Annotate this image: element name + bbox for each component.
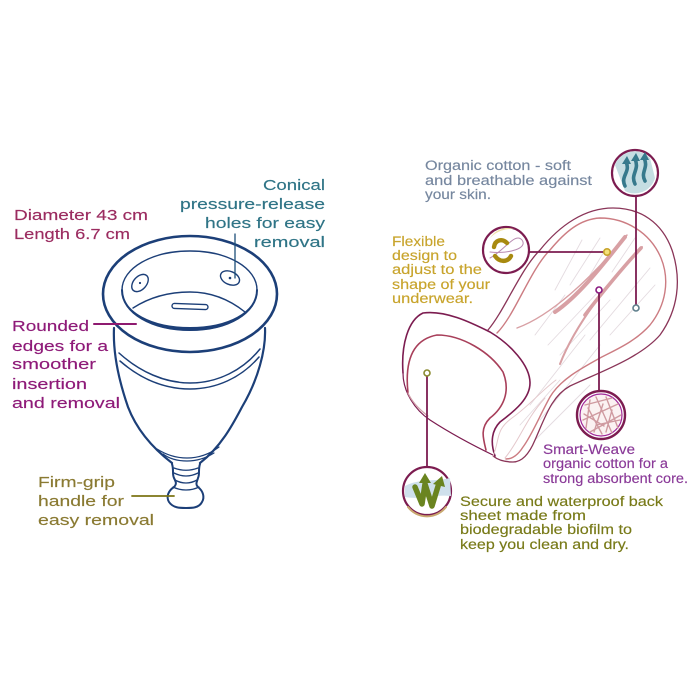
menstrual cup illustration <box>103 236 277 508</box>
pad tail folds <box>493 380 556 458</box>
text: dimensions: Diameter 43 cm <box>14 207 148 224</box>
text: firm grip handle <box>38 474 154 529</box>
slot <box>172 303 208 310</box>
text: organic cotton: your skin. <box>425 187 491 202</box>
cup body <box>114 328 265 463</box>
front wing outer <box>403 313 530 456</box>
pad absorbent stripes <box>517 235 627 328</box>
text: dimensions: Length 6.7 cm <box>14 226 130 243</box>
cup lower seam <box>157 447 219 461</box>
text: back sheet <box>460 494 663 552</box>
icon: waterproof back sheet <box>403 370 451 516</box>
text: back sheet: sheet made from <box>460 508 586 523</box>
text: dimensions <box>14 207 148 243</box>
text: smart weave <box>543 442 688 486</box>
text: rounded edges: and removal <box>12 395 120 412</box>
text: flexible design: design to <box>392 248 457 263</box>
handle <box>168 464 203 508</box>
text: conical holes <box>180 177 326 251</box>
right hole <box>218 268 242 288</box>
pad outer outline <box>488 208 677 462</box>
pad hatching <box>520 238 655 440</box>
handle rings <box>173 468 199 490</box>
text: rounded edges: Rounded <box>12 318 89 335</box>
text: back sheet: keep you clean and dry. <box>460 537 629 552</box>
icon: smart weave <box>577 287 625 439</box>
left hole <box>128 271 152 295</box>
text: conical holes: Conical <box>263 177 325 194</box>
text: rounded edges: insertion <box>12 376 87 393</box>
sanitary pad illustration <box>403 208 677 462</box>
text: organic cotton <box>425 158 592 202</box>
icon: flexible design <box>483 227 610 273</box>
text: conical holes: holes for easy <box>205 215 326 232</box>
text: flexible design: adjust to the <box>392 262 482 277</box>
text: rounded edges: smoother <box>12 356 96 373</box>
text: back sheet: Secure and waterproof back <box>460 494 663 509</box>
inner rim <box>122 251 257 330</box>
text: conical holes: removal <box>254 234 325 251</box>
pointer: conical holes <box>139 234 235 284</box>
text: organic cotton: Organic cotton - soft <box>425 158 571 173</box>
text: conical holes: pressure-release <box>180 196 325 213</box>
text: flexible design: shape of your <box>392 277 491 292</box>
text: rounded edges: edges for a <box>12 338 109 355</box>
inner fold <box>133 292 245 312</box>
front wing inner <box>407 335 506 450</box>
text: flexible design: underwear. <box>392 291 473 306</box>
text: smart weave: Smart-Weave <box>543 442 635 457</box>
cup bands <box>119 349 260 389</box>
icon: breathable cotton <box>612 150 658 311</box>
text: flexible design <box>392 234 491 306</box>
text: firm grip handle: handle for <box>38 493 124 510</box>
text: firm grip handle: Firm-grip <box>38 474 115 491</box>
text: smart weave: organic cotton for a <box>543 456 669 471</box>
text: organic cotton: and breathable against <box>425 173 592 188</box>
text: back sheet: biodegradable biofilm to <box>460 522 632 537</box>
pointer: rounded edges <box>94 323 136 325</box>
text: flexible design: Flexible <box>392 234 445 249</box>
pointer: handle <box>132 495 174 497</box>
text: rounded edges <box>12 318 120 412</box>
pad inner outline <box>497 218 666 459</box>
text: smart weave: strong absorbent core. <box>543 471 688 486</box>
text: firm grip handle: easy removal <box>38 512 154 529</box>
cup rim <box>103 236 277 352</box>
